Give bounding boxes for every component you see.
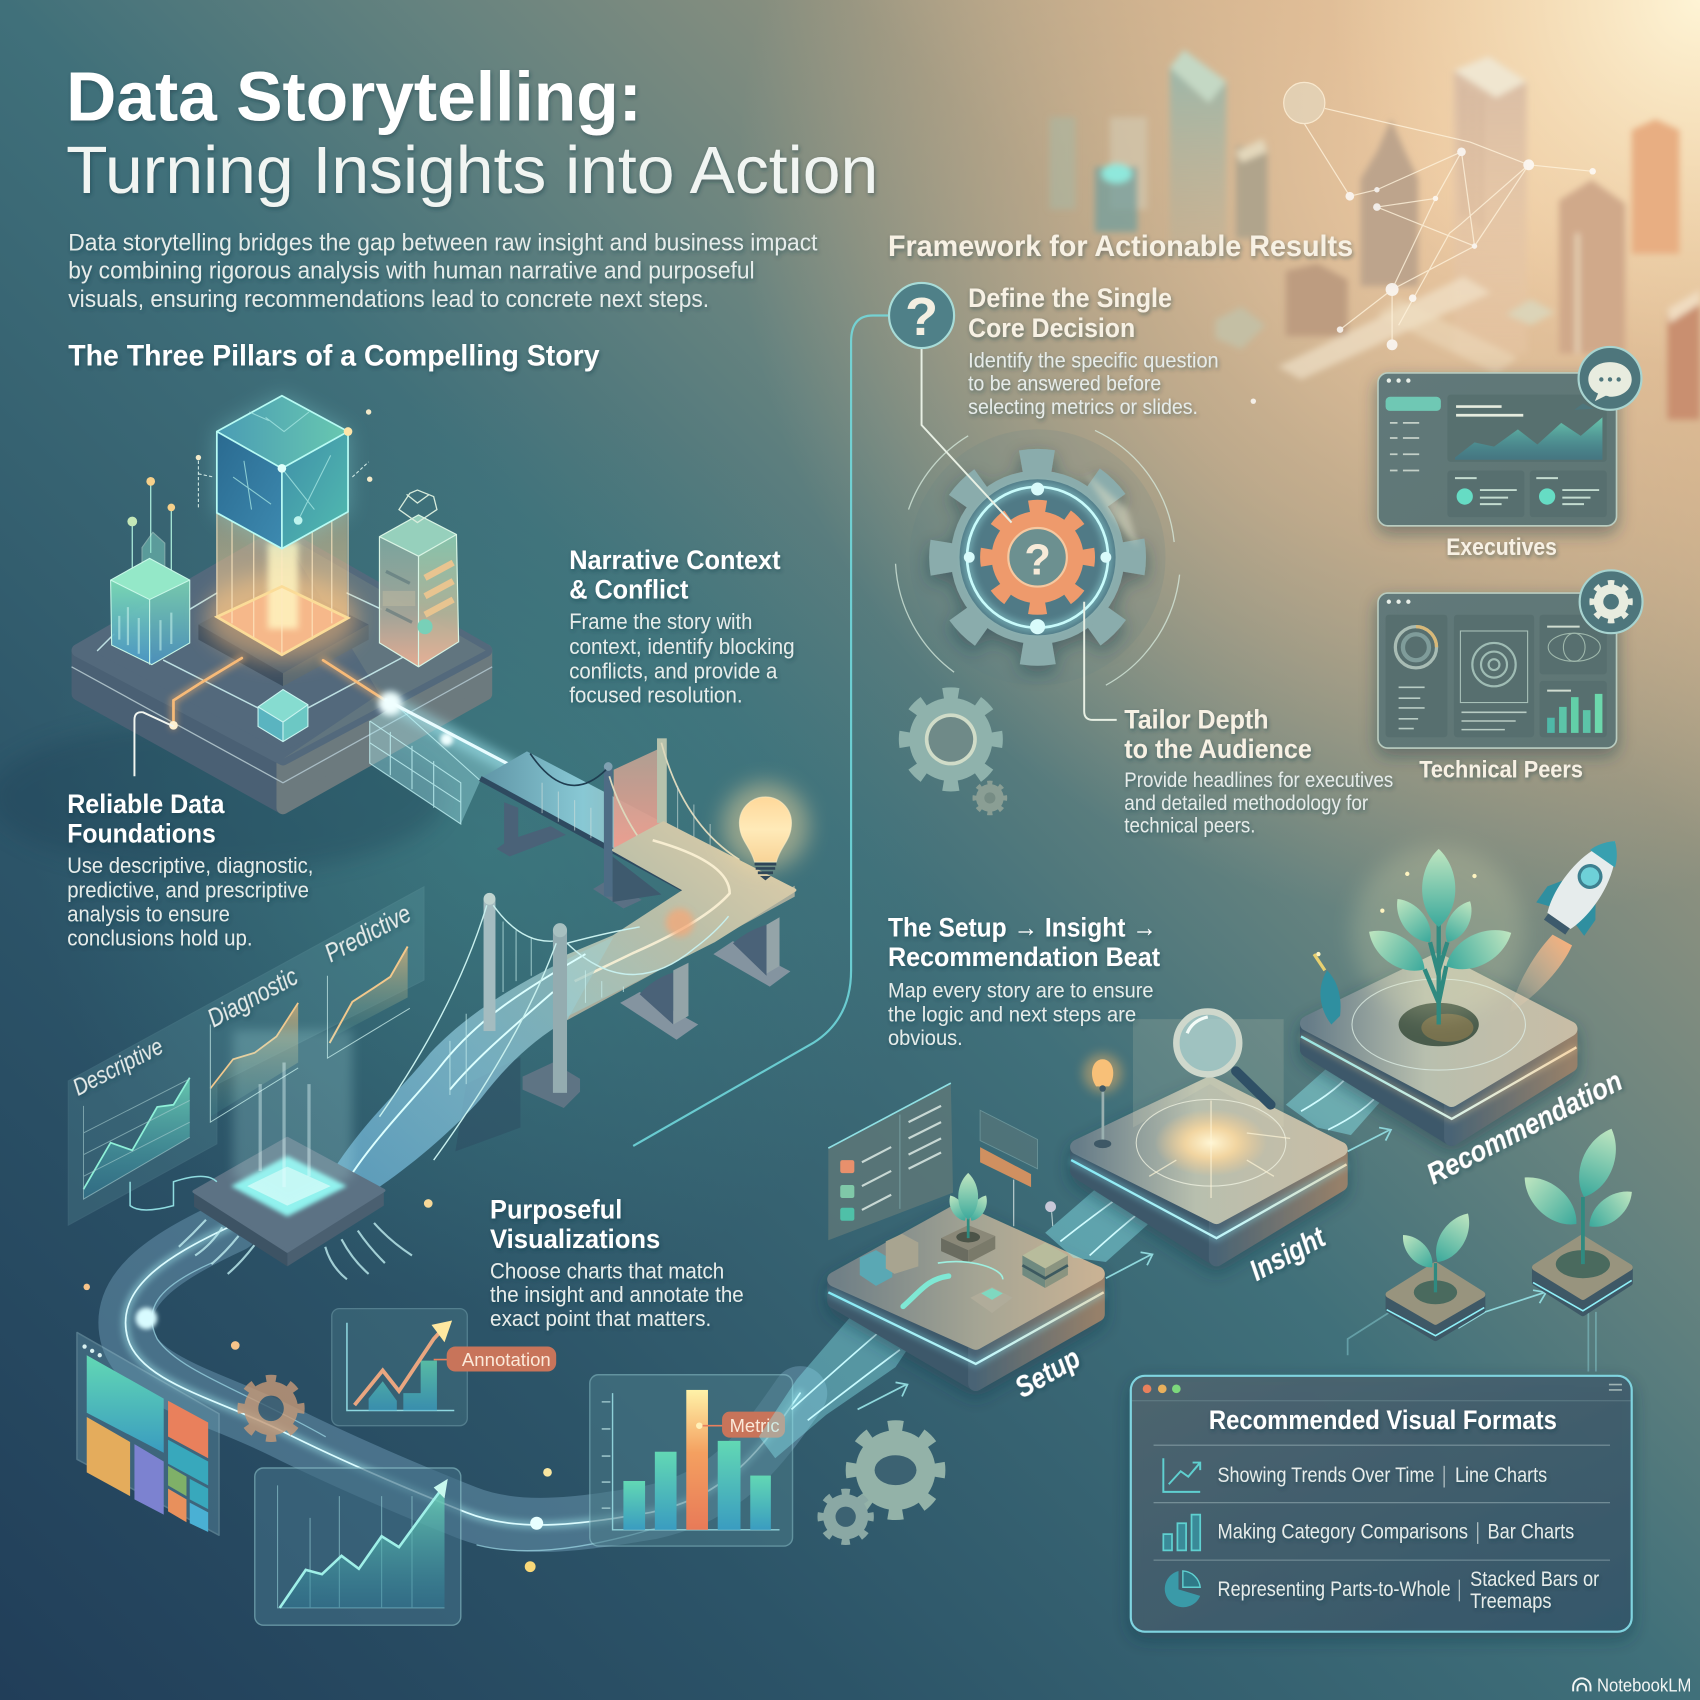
panel: recommended visual formats <box>1131 1376 1632 1632</box>
callout: tailor depth to the audience: Provide headlines for executives <box>1124 767 1393 792</box>
callout: tailor depth to the audience <box>1124 704 1393 838</box>
upper suspension bridge <box>480 738 739 909</box>
circuit traces <box>98 593 403 730</box>
callout: purposeful visualizations: Visualizations <box>490 1223 660 1254</box>
row: comparisons <box>1163 1515 1574 1550</box>
title <box>66 57 878 208</box>
callout: setup insight recommendation beat: obvious. <box>888 1025 963 1050</box>
setup platform <box>759 1173 1104 1458</box>
executives dashboard <box>1378 347 1641 526</box>
platform labels <box>1010 1065 1628 1405</box>
row: comparisons: Making Category Comparisons <box>1218 1520 1468 1543</box>
peach road deck and lightbulb <box>567 783 809 1040</box>
lower suspension bridge <box>336 893 729 1190</box>
intro paragraph: by combining rigorous analysis with human narrative and purposeful <box>68 258 755 285</box>
callout: purposeful visualizations: Choose charts that match <box>490 1258 724 1283</box>
insight label: Insight <box>1245 1221 1332 1288</box>
metric label: Metric <box>730 1415 780 1436</box>
callout: setup insight recommendation beat: the logic and next steps are <box>888 1001 1136 1026</box>
setup props <box>860 1173 1068 1313</box>
small glowing cube <box>258 690 308 742</box>
callout: reliable data foundations: Reliable Data <box>67 788 225 819</box>
callout: tailor depth to the audience: and detailed methodology for <box>1124 790 1368 815</box>
glass stream to upper bridge <box>370 692 520 824</box>
annotated line chart <box>332 1309 556 1426</box>
callout: tailor depth to the audience: to the Audience <box>1124 733 1312 764</box>
callout: reliable data foundations <box>67 788 313 950</box>
callout: setup insight recommendation beat <box>888 912 1160 1050</box>
callout: reliable data foundations: conclusions hold up. <box>67 925 253 950</box>
row: parts to whole <box>1165 1568 1599 1613</box>
core decision gear <box>896 429 1180 685</box>
magnifying glass <box>1176 1012 1271 1105</box>
title: Turning Insights into Action <box>66 133 878 208</box>
row: parts to whole: Treemaps <box>1470 1590 1551 1613</box>
seedling large <box>1515 1123 1639 1313</box>
insight platform <box>1071 1019 1347 1259</box>
callout: define the single core decision: Identify the specific question <box>968 348 1219 373</box>
NotebookLM watermark: NotebookLM <box>1597 1674 1691 1695</box>
small figure beside plant <box>1314 954 1341 1025</box>
heading: framework: Framework for Actionable Results <box>888 231 1353 263</box>
callout: purposeful visualizations: the insight and annotate the <box>490 1282 744 1307</box>
stream setup to insight <box>1045 1183 1158 1262</box>
callout: narrative context: Narrative Context <box>569 544 781 575</box>
label: Descriptive: Descriptive <box>69 1033 168 1101</box>
intro paragraph <box>68 229 818 313</box>
lamp on insight platform <box>1083 1054 1122 1148</box>
intro paragraph: Data storytelling bridges the gap between raw insight and business impact <box>68 229 818 256</box>
microchip <box>130 1030 412 1279</box>
panel heading: Recommended Visual Formats <box>1209 1404 1557 1435</box>
callout: narrative context <box>569 544 795 708</box>
callout: define the single core decision <box>968 282 1219 419</box>
stream insight to recommendation <box>1286 1060 1391 1135</box>
row: trends: Showing Trends Over Time <box>1218 1464 1434 1487</box>
callout: narrative context: focused resolution. <box>569 683 743 708</box>
recommendation label: Recommendation <box>1422 1065 1628 1191</box>
annotation label: Annotation <box>462 1349 551 1370</box>
diagnostic chart <box>210 1003 298 1122</box>
chat badge <box>1574 347 1641 410</box>
question badge and leader line <box>889 283 1012 523</box>
row: trends <box>1163 1458 1547 1492</box>
label: technical peers: Technical Peers <box>1419 756 1583 783</box>
callout: define the single core decision: Core Decision <box>968 312 1135 343</box>
growth line chart <box>255 1468 461 1625</box>
callout: narrative context: context, identify blocking <box>569 634 795 659</box>
network constellation <box>1251 82 1596 404</box>
predictive chart <box>327 946 410 1058</box>
callout line: reliable data <box>134 712 173 776</box>
callout: define the single core decision: Define the Single <box>968 282 1172 313</box>
recommendation platform <box>1301 961 1576 1138</box>
callout: tailor depth to the audience: Tailor Depth <box>1124 704 1268 735</box>
row: trends: Line Charts <box>1455 1464 1547 1487</box>
metric bar chart <box>590 1375 793 1546</box>
heading: three pillars: The Three Pillars of a Compelling Story <box>68 340 600 372</box>
descriptive chart <box>83 1078 190 1199</box>
small gears beside framework <box>907 695 1005 813</box>
connector line between pillars and framework <box>633 315 889 1146</box>
seedling small <box>1387 1207 1484 1338</box>
label: Diagnostic: Diagnostic <box>202 961 303 1033</box>
gear question mark: ? <box>1024 537 1051 585</box>
callout: reliable data foundations: Use descriptive, diagnostic, <box>67 853 313 878</box>
setup glass screens <box>828 1083 1056 1240</box>
callout: reliable data foundations: predictive, and prescriptive <box>67 878 309 903</box>
annotation label <box>447 1347 556 1371</box>
blurred skyline backdrop <box>1049 50 1700 420</box>
callout: purposeful visualizations <box>490 1194 744 1331</box>
large plant <box>1316 846 1525 1025</box>
callout: reliable data foundations: Foundations <box>67 817 216 848</box>
callout: purposeful visualizations: exact point that matters. <box>490 1306 711 1331</box>
callout: setup insight recommendation beat: Recommendation Beat <box>888 941 1160 972</box>
callout: tailor depth to the audience: technical peers. <box>1124 813 1255 838</box>
right data tower <box>379 490 459 667</box>
treemap panel <box>77 1332 219 1535</box>
row: comparisons: Bar Charts <box>1488 1520 1574 1543</box>
data cube <box>196 396 372 549</box>
label: executives: Executives <box>1446 534 1557 561</box>
callout: narrative context: Frame the story with <box>569 609 752 634</box>
green cube <box>111 477 190 665</box>
rocket <box>1509 824 1639 1014</box>
flow road <box>83 1199 800 1572</box>
title: Data Storytelling: <box>66 57 642 135</box>
callout: reliable data foundations: analysis to ensure <box>67 902 230 927</box>
flow arrows between platforms <box>858 1128 1596 1409</box>
metric label <box>722 1412 785 1438</box>
intro paragraph: visuals, ensuring recommendations lead to concrete next steps. <box>68 286 709 313</box>
badge question mark: ? <box>905 287 938 347</box>
callout: purposeful visualizations: Purposeful <box>490 1194 622 1225</box>
technical peers dashboard <box>1378 570 1643 748</box>
callout: setup insight recommendation beat: Map every story are to ensure <box>888 977 1154 1002</box>
callout: narrative context: & Conflict <box>569 573 688 604</box>
platform base <box>72 533 492 808</box>
settings badge <box>1580 570 1643 633</box>
row: parts to whole: Stacked Bars or <box>1470 1568 1599 1591</box>
glass pillar with glowing core <box>206 477 358 661</box>
callout: narrative context: conflicts, and provide a <box>569 659 778 684</box>
isometric data foundation <box>0 396 492 873</box>
row: parts to whole: Representing Parts-to-Whole <box>1218 1578 1451 1601</box>
translucent gear on road <box>242 1380 300 1437</box>
tailor depth leader line <box>1084 602 1117 720</box>
callout: define the single core decision: to be answered before <box>968 370 1161 395</box>
label: Predictive: Predictive <box>319 898 416 968</box>
setup label: Setup <box>1010 1342 1086 1405</box>
decorative gears lower centre <box>822 1428 938 1541</box>
analysis chart panels <box>68 887 424 1225</box>
callout: setup insight recommendation beat: The Setup → Insight → <box>888 912 1157 943</box>
callout: define the single core decision: selecting metrics or slides. <box>968 394 1198 419</box>
